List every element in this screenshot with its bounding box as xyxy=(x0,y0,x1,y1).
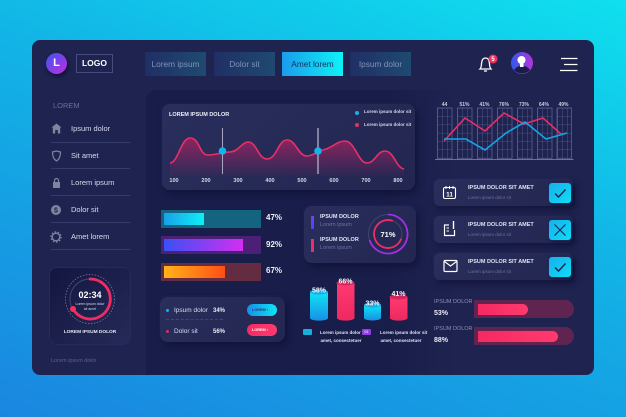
stat bar: 53% xyxy=(434,299,574,318)
x axis labels: 500 xyxy=(297,178,307,184)
donut xyxy=(368,214,408,254)
cylinder legend: Lorem ipsum dolor sit xyxy=(320,330,367,335)
button: blue: LOREM › xyxy=(252,308,268,312)
progress bars: 92% xyxy=(266,240,282,249)
navigation tabs xyxy=(145,52,411,76)
icon: gear xyxy=(50,231,62,243)
navigation tabs: Ipsum dolor xyxy=(359,59,402,69)
clock time: 02:34 xyxy=(78,290,102,300)
progress bars xyxy=(161,210,282,281)
task text 1: IPSUM DOLOR SIT AMET xyxy=(468,185,534,191)
x axis labels: 100 xyxy=(169,178,179,184)
panel: task card 3 xyxy=(434,253,573,280)
stat bar: 53%: 53% xyxy=(434,310,448,317)
main dashboard panel xyxy=(32,40,594,375)
line chart with grid columns: 76% xyxy=(499,102,510,108)
line chart with grid columns xyxy=(435,102,574,160)
line chart with grid columns: 44 xyxy=(442,102,447,108)
navigation tabs: Amet lorem xyxy=(291,59,334,69)
icon: home xyxy=(52,124,62,134)
text: Lorem ipsum dolor sit xyxy=(468,269,511,274)
panel: donut chart: IPSUM DOLOR xyxy=(320,214,359,220)
x axis labels: 800 xyxy=(393,178,403,184)
line chart with grid columns: 73% xyxy=(519,102,530,108)
logo xyxy=(46,53,113,78)
line chart with grid columns: 51% xyxy=(459,102,470,108)
panel: buttons list: 56% xyxy=(213,329,225,335)
line chart with grid columns: 41% xyxy=(479,102,490,108)
panel: buttons list: 34% xyxy=(213,308,225,314)
panel: task card 1 xyxy=(434,179,573,206)
cylinder chart: 33% xyxy=(365,300,380,308)
clock caption: Lorem ipsum dolor xyxy=(76,302,104,306)
wave area chart xyxy=(170,128,404,175)
donut: 71% xyxy=(380,230,396,239)
progress bars: 67% xyxy=(266,266,282,275)
cylinder legend: Lorem ipsum dolor sit xyxy=(380,330,427,335)
check button xyxy=(549,257,571,277)
menu item: Lorem ipsum: Lorem ipsum xyxy=(71,178,114,187)
legend: Lorem ipsum dolor sit xyxy=(364,109,411,114)
stat bar: 53%: IPSUM DOLOR xyxy=(434,299,473,305)
panel: donut chart: Lorem ipsum xyxy=(320,222,352,228)
panel: clock timer xyxy=(50,268,130,344)
text: Lorem ipsum dolor sit xyxy=(468,232,511,237)
navigation tabs: Lorem ipsum xyxy=(152,59,199,69)
icon: notification bell xyxy=(478,54,498,72)
stat bar: 88%: 88% xyxy=(434,337,448,344)
text: Lorem ipsum dolor sit xyxy=(468,195,511,200)
icon: lock xyxy=(53,178,60,188)
icon: dollar coin: $ xyxy=(54,208,58,214)
cylinder legend: amet, consectetuer xyxy=(320,338,362,342)
chart title: LOREM IPSUM DOLOR xyxy=(169,112,229,118)
menu item: Amet lorem: Amet lorem xyxy=(71,232,109,241)
icon: calendar: 11 xyxy=(446,192,453,198)
panel: donut chart xyxy=(304,206,416,263)
panel: donut chart: IPSUM DOLOR xyxy=(320,237,359,243)
bar 67% xyxy=(161,263,261,281)
x axis labels xyxy=(169,178,403,184)
panel: wave chart xyxy=(162,104,415,190)
menu item: Sit amet: Sit amet xyxy=(71,151,99,160)
x axis labels: 700 xyxy=(361,178,371,184)
panel: task card 2 xyxy=(434,216,573,243)
panel: buttons list: Ipsum dolor xyxy=(174,307,208,314)
cylinder chart: 41% xyxy=(391,291,406,298)
stat bar: 88%: IPSUM DOLOR xyxy=(434,326,473,332)
menu item: Ipsum dolor: Ipsum dolor xyxy=(71,124,110,133)
menu item: Dolor sit: Dolor sit xyxy=(71,205,99,214)
stat bar: 88% xyxy=(434,326,574,345)
legend: Lorem ipsum dolor sit xyxy=(364,122,411,127)
navigation tabs: Dolor sit xyxy=(229,59,260,69)
line chart with grid columns: 49% xyxy=(558,102,569,108)
x axis labels: 400 xyxy=(265,178,275,184)
cylinder chart: 58% xyxy=(312,288,327,294)
cylinder chart xyxy=(310,278,408,321)
legend tag: purple: 01 xyxy=(364,329,369,334)
legend tag: cyan xyxy=(303,329,312,335)
icon: document pen xyxy=(444,221,456,236)
cylinder chart: 66% xyxy=(338,278,353,286)
task text 2: IPSUM DOLOR SIT AMET xyxy=(468,222,534,228)
icon: dollar coin xyxy=(51,205,61,215)
icon: hamburger menu xyxy=(560,58,578,72)
panel: buttons list: Dolor sit xyxy=(174,328,198,335)
bar 92% xyxy=(161,236,261,254)
line chart with grid columns: 64% xyxy=(539,102,550,108)
cylinder legend: amet, consectetuer xyxy=(380,338,422,342)
clock caption xyxy=(76,302,104,310)
logo: L xyxy=(53,57,60,69)
button: red: LOREM › xyxy=(252,328,268,332)
button: red xyxy=(247,324,277,336)
bar 47% xyxy=(161,210,261,228)
check button xyxy=(549,183,571,203)
sidebar footer: Lorem ipsum dolor xyxy=(51,358,97,364)
button: blue xyxy=(247,304,277,316)
icon: mail xyxy=(443,260,458,272)
icon: calendar xyxy=(442,186,456,199)
legend tag: purple xyxy=(362,329,371,335)
x axis labels: 600 xyxy=(329,178,339,184)
clock ring xyxy=(65,274,115,324)
progress bars: 47% xyxy=(266,213,282,222)
x axis labels: 300 xyxy=(233,178,243,184)
logo: LOGO xyxy=(82,58,107,68)
cylinder legend xyxy=(303,329,428,343)
clock caption: sit amet xyxy=(84,306,96,310)
x axis labels: 200 xyxy=(201,178,211,184)
legend xyxy=(355,109,412,127)
icon: user avatar xyxy=(511,52,533,74)
cross button xyxy=(549,220,571,240)
icon: notification bell: 5 xyxy=(491,57,495,63)
panel: donut chart: Lorem ipsum xyxy=(320,245,352,251)
panel: buttons list xyxy=(160,297,285,342)
clock title: LOREM IPSUM DOLOR xyxy=(64,330,116,335)
sidebar menu: LOREM xyxy=(53,101,80,110)
task text 3: IPSUM DOLOR SIT AMET xyxy=(468,259,534,265)
icon: shield xyxy=(52,150,62,162)
